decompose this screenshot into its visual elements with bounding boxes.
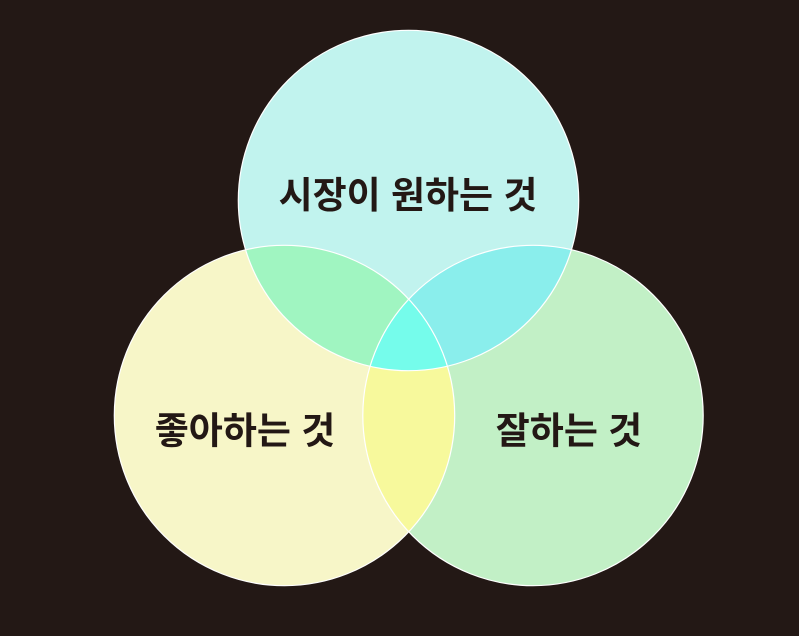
circle outlines bbox=[114, 30, 703, 586]
label: good at: 잘하는 것 bbox=[496, 410, 642, 452]
overlap: market and good at bbox=[410, 246, 571, 366]
overlap: market and like bbox=[246, 246, 408, 366]
circle: what you are good at bbox=[363, 245, 703, 586]
circle: what you like bbox=[114, 245, 455, 586]
label: market wants: 시장이 원하는 것 bbox=[279, 175, 537, 216]
overlap: all three bbox=[370, 300, 447, 370]
label: like: 좋아하는 것 bbox=[155, 410, 335, 452]
overlap: like and good at bbox=[363, 366, 454, 531]
venn diagram bbox=[114, 30, 704, 586]
circle: what the market wants bbox=[238, 30, 579, 371]
